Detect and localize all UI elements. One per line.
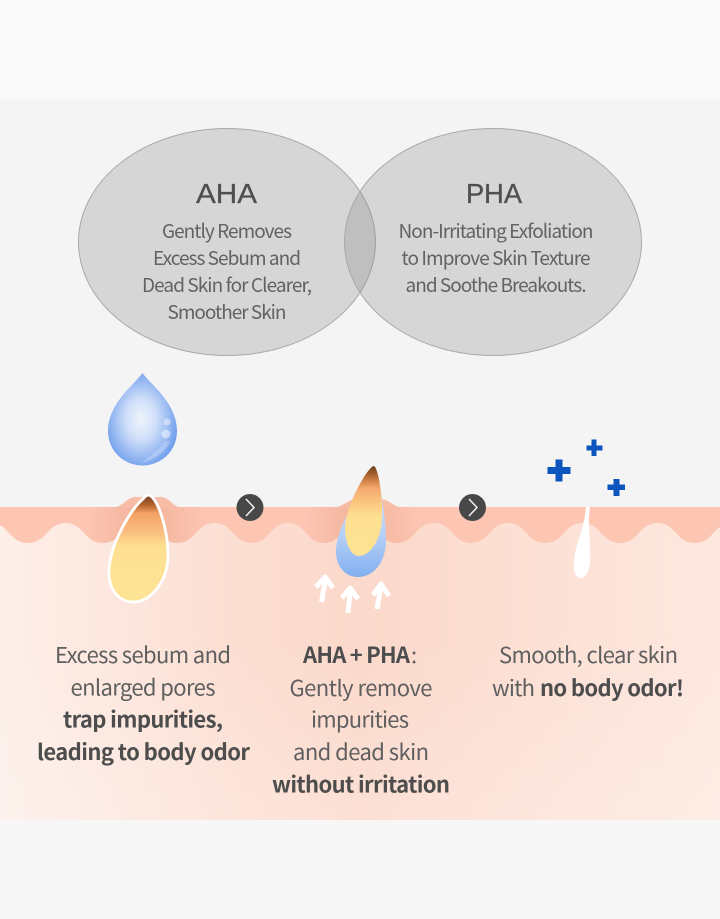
pore shading left: [104, 507, 186, 543]
text: AHA description: Dead Skin for Clearer,: [142, 271, 312, 298]
arrow button 1: [236, 494, 264, 521]
text: AHA description: Excess Sebum and: [153, 244, 301, 271]
circle: PHA: [344, 128, 642, 356]
text: AHA description: Smoother Skin: [168, 298, 286, 325]
text: step 3 caption: with: [492, 671, 535, 703]
venn diagram: [78, 128, 642, 356]
circle: AHA: [78, 128, 376, 356]
text: step 1 caption: Excess sebum and: [55, 638, 231, 670]
text: AHA description: Gently Removes: [162, 217, 292, 244]
text: step 3 caption: no body odor!: [540, 671, 684, 703]
text: step 3 caption: [492, 638, 684, 703]
arrow button 2: [459, 494, 486, 521]
text: step 2 caption: AHA + PHA: [302, 638, 411, 670]
pore shading middle: [323, 507, 402, 543]
pore bump middle: [333, 499, 403, 508]
icon: pore being cleansed: [336, 466, 386, 577]
text: PHA description: and Soothe Breakouts.: [406, 271, 586, 298]
text: step 1 caption: enlarged pores: [70, 670, 216, 702]
text: step 2 caption: impurities: [311, 702, 409, 734]
upper skin wave: [0, 507, 720, 547]
text: step 1 caption: [37, 638, 250, 767]
text: step 2 caption: without irritation: [272, 768, 450, 800]
text: step 2 caption: and dead skin: [293, 735, 429, 767]
text: step 2 caption: Gently remove: [290, 671, 432, 703]
heading: PHA: PHA: [466, 178, 522, 209]
icon: clogged pore with sebum: [109, 495, 168, 602]
text: step 1 caption: leading to body odor: [37, 735, 250, 767]
lower background band: [0, 820, 720, 919]
heading: AHA: AHA: [196, 178, 257, 209]
lower skin: [0, 515, 720, 820]
text: step 2 caption: :: [411, 638, 417, 670]
text: step 1 caption: trap impurities,: [63, 702, 223, 734]
icon: water drop: [108, 373, 177, 466]
icon: blue plus signs: [548, 440, 625, 496]
text: step 3 caption: Smooth, clear skin: [499, 638, 678, 670]
text: PHA description: [398, 217, 594, 298]
text: PHA description: Non-Irritating Exfoliation: [398, 217, 594, 244]
text: AHA description: [142, 217, 312, 325]
pore bump left: [113, 497, 182, 508]
text: step 2 caption: [272, 638, 450, 800]
skin layers: [0, 497, 720, 820]
icon: upward arrows: [316, 577, 389, 613]
icon: clean hair follicle: [574, 507, 590, 578]
background panel: [0, 100, 720, 820]
text: PHA description: to Improve Skin Texture: [402, 244, 590, 271]
